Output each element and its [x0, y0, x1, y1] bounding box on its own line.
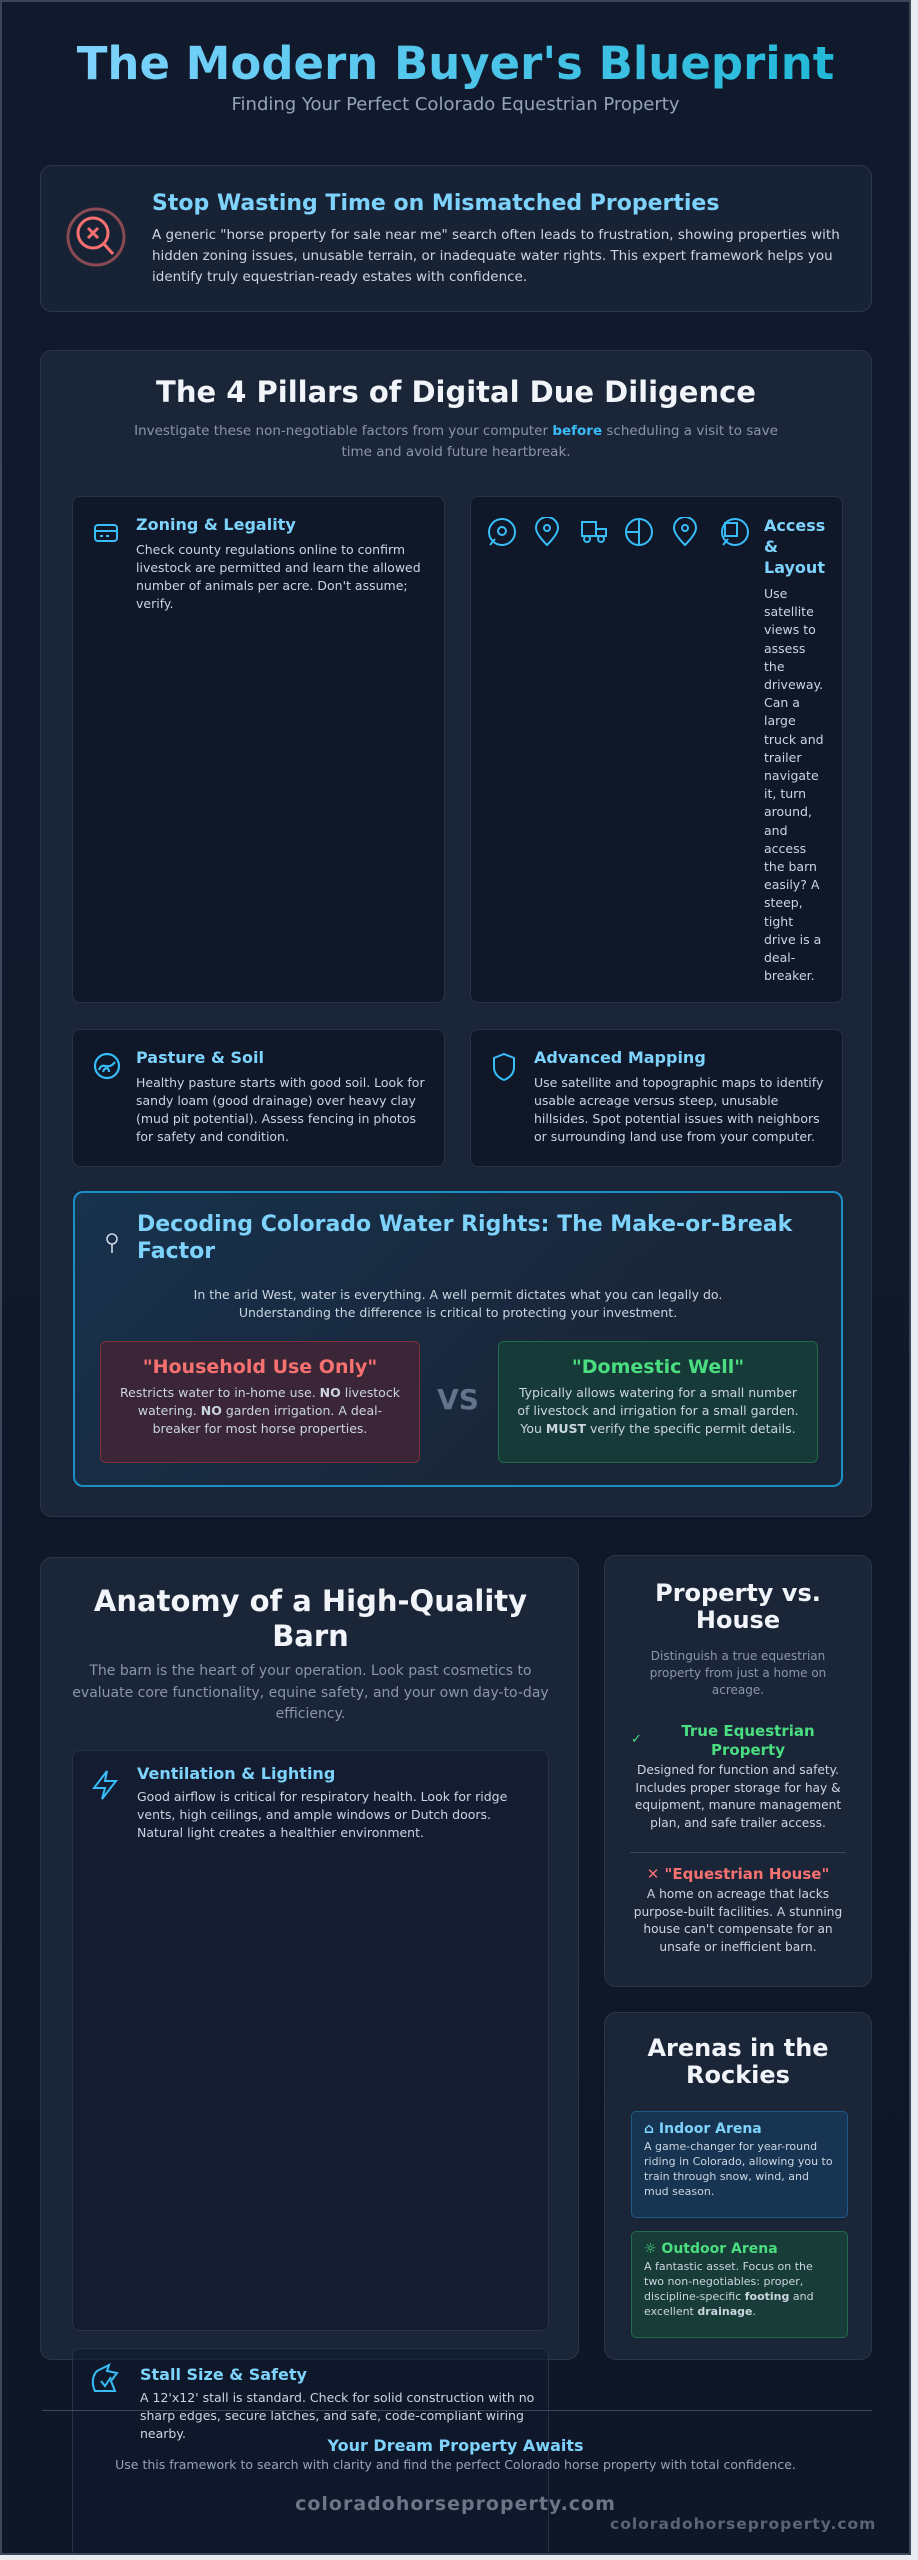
- card: mapping: [470, 1029, 843, 1167]
- heading: The 4 Pillars of Digital Due Diligence: [156, 375, 756, 409]
- callout: water rights: Decoding Colorado Water Rights: The Make-or-Break Factor: [137, 1212, 792, 1264]
- icon: stall: [92, 2363, 119, 2392]
- item: true equestrian: [631, 1722, 841, 1830]
- card: stall: [72, 2348, 549, 2560]
- card: ventilation: [72, 1750, 549, 2331]
- box: outdoor: ☼ Outdoor Arena: [644, 2241, 778, 2257]
- icon: id card: [94, 524, 118, 542]
- card: ventilation: Good airflow is critical for respiratory health. Look for ridge vents, high ceilings, and ample windows or Dutch doors. Natural light creates a healthier environment.: [137, 1789, 507, 1840]
- box: domestic: [498, 1341, 818, 1463]
- callout: water rights: [73, 1191, 843, 1487]
- icon row: [488, 517, 749, 546]
- item: true equestrian: ✓: [631, 1732, 642, 1747]
- callout: water rights: Understanding the difference is critical to protecting your investment.: [239, 1305, 677, 1320]
- card: ventilation: Ventilation & Lighting: [137, 1764, 335, 1783]
- footer heading: Your Dream Property Awaits: [327, 2436, 584, 2455]
- box: outdoor: [631, 2231, 848, 2338]
- watermark: coloradohorseproperty.com: [610, 2515, 876, 2533]
- box: domestic: "Domestic Well": [572, 1356, 744, 1378]
- item: true equestrian: True Equestrian Property: [681, 1722, 815, 1759]
- text: A generic "horse property for sale near me" search often leads to frustration, showing properties with hidden zoning issues, unusable terrain, or inadequate water rights. This expert framework helps you identify truly equestrian-ready estates with confidence.: [152, 227, 840, 285]
- subtitle: Finding Your Perfect Colorado Equestrian Property: [232, 94, 680, 115]
- panel: arenas: [604, 2012, 872, 2360]
- icon: search x: [66, 208, 126, 266]
- box: household: [100, 1341, 420, 1463]
- panel: property vs house: Property vs. House: [655, 1579, 821, 1634]
- item: equestrian house: ✕ "Equestrian House": [647, 1865, 829, 1883]
- panel: barn: Anatomy of a High-Quality Barn: [94, 1584, 527, 1653]
- box: domestic: Typically allows watering for a small number of livestock and irrigation for a small garden. You MUST verify the specific permit details.: [517, 1385, 799, 1436]
- box: outdoor: A fantastic asset. Focus on the two non-negotiables: proper, discipline-specific footing and excellent drainage.: [644, 2260, 814, 2318]
- heading: Stop Wasting Time on Mismatched Properties: [152, 191, 719, 216]
- vs: VS: [437, 1383, 479, 1416]
- card: stall: Stall Size & Safety: [140, 2365, 307, 2384]
- card: zoning: Zoning & Legality: [136, 515, 296, 534]
- item: equestrian house: A home on acreage that lacks purpose-built facilities. A stunning house can't compensate for an unsafe or inefficient barn.: [634, 1887, 842, 1954]
- box: indoor: ⌂ Indoor Arena: [644, 2121, 762, 2137]
- footer brand: coloradohorseproperty.com: [295, 2493, 616, 2515]
- card: zoning: [72, 496, 445, 1003]
- panel: barn: [40, 1557, 579, 2360]
- box: indoor: [631, 2111, 848, 2218]
- box: indoor: A game-changer for year-round riding in Colorado, allowing you to train through snow, wind, and mud season.: [644, 2140, 833, 2198]
- panel: property vs house: [604, 1555, 872, 1987]
- panel: intro: [40, 165, 872, 312]
- card: access: Use satellite views to assess the driveway. Can a large truck and trailer navigate it, turn around, and access the barn easily? A steep, tight drive is a deal-breaker.: [764, 586, 824, 983]
- panel: property vs house: Distinguish a true equestrian property from just a home on acreage.: [650, 1649, 826, 1697]
- card: access: [470, 496, 843, 1003]
- icon: shield: [493, 1052, 515, 1082]
- card: pasture: Pasture & Soil: [136, 1048, 264, 1067]
- card: mapping: Advanced Mapping: [534, 1048, 706, 1067]
- card: pasture: Healthy pasture starts with good soil. Look for sandy loam (good drainage) over heavy clay (mud pit potential). Assess fencing in photos for safety and condition.: [136, 1075, 425, 1144]
- callout: water rights: In the arid West, water is everything. A well permit dictates what you can legally do.: [194, 1287, 722, 1302]
- icon: water: [106, 1233, 118, 1253]
- title: The Modern Buyer's Blueprint: [77, 37, 834, 90]
- panel: arenas: Arenas in the Rockies: [647, 2034, 829, 2089]
- card: pasture: [72, 1029, 445, 1167]
- card: stall: A 12'x12' stall is standard. Check for solid construction with no sharp edges, secure latches, and safe, code-compliant wiring nearby.: [140, 2390, 534, 2441]
- panel: barn: The barn is the heart of your operation. Look past cosmetics to evaluate core functionality, equine safety, and your own day-to-day efficiency.: [72, 1663, 549, 1722]
- icon: lightning: [92, 1770, 118, 1800]
- card: zoning: Check county regulations online to confirm livestock are permitted and learn the allowed number of animals per acre. Don't assume; verify.: [136, 542, 421, 611]
- box: household: "Household Use Only": [143, 1356, 377, 1378]
- box: household: Restricts water to in-home use. NO livestock watering. NO garden irrigation. A deal-breaker for most horse properties.: [120, 1385, 400, 1436]
- icon: pasture: [94, 1052, 120, 1080]
- card: mapping: Use satellite and topographic maps to identify usable acreage versus steep, unusable hillsides. Spot potential issues with neighbors or surrounding land use from your computer.: [534, 1075, 823, 1144]
- panel: 4 pillars: [40, 350, 872, 1517]
- card: access: Access & Layout: [764, 516, 825, 577]
- subtext: Investigate these non-negotiable factors from your computer before scheduling a visit to save time and avoid future heartbreak.: [134, 423, 778, 460]
- item: true equestrian: Designed for function and safety. Includes proper storage for hay & equipment, manure management plan, and safe trailer access.: [635, 1763, 841, 1830]
- footer text: Use this framework to search with clarity and find the perfect Colorado horse property with total confidence.: [115, 2457, 796, 2472]
